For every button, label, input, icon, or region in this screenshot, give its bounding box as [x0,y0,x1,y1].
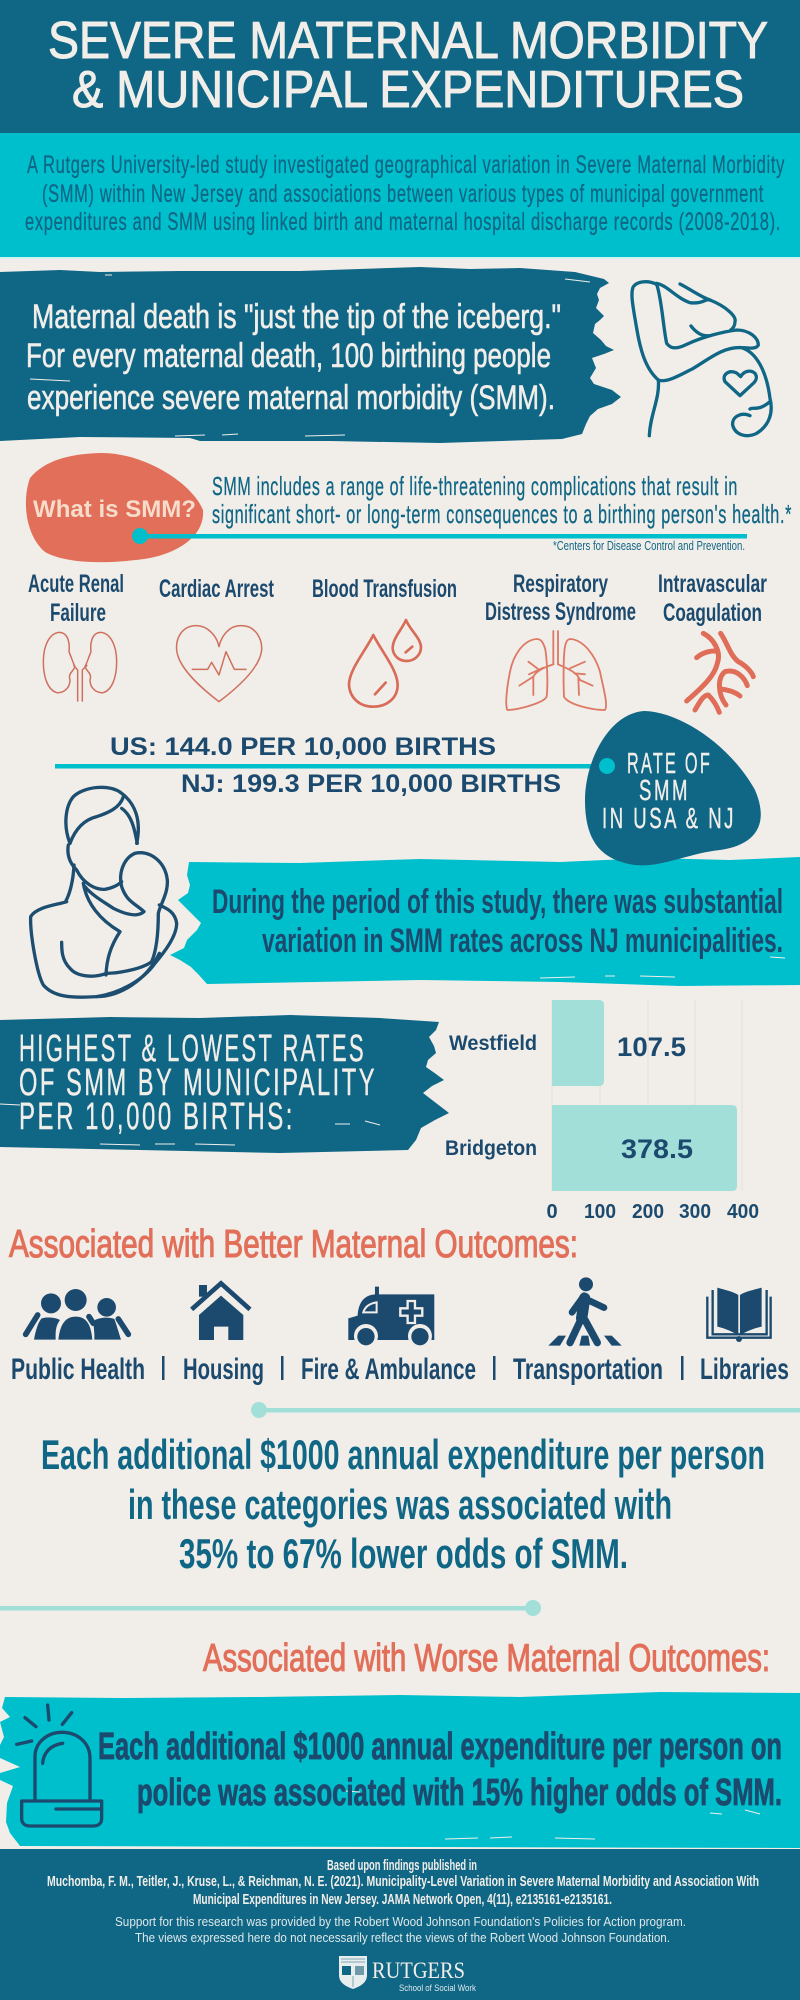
bar chart: SMM by municipality: 400 [727,1201,759,1223]
brush banner: highest and lowest rates: OF SMM BY MUNICIPALITY [19,1062,377,1104]
complication: acute renal failure: Failure [50,599,106,627]
bar chart: SMM by municipality: 100 [584,1201,616,1223]
icon: public health [26,1289,128,1340]
icon: mother and baby [31,787,177,997]
complication: blood transfusion: Blood Transfusion [312,575,457,603]
brush banner: highest and lowest rates: HIGHEST & LOWEST RATES [19,1028,366,1070]
funding note: Support for this research was provided by the Robert Wood Johnson Foundation's Policies for Action program. [115,1914,686,1929]
complication: cardiac arrest [159,575,274,702]
complication: acute renal failure [28,570,124,702]
source citation: Based upon findings published in [327,1857,477,1874]
lower odds statement: 35% to 67% lower odds of SMM. [179,1530,628,1577]
callout: tip of the iceberg [0,267,621,443]
bar chart: SMM by municipality: 107.5 [617,1032,686,1062]
funding note: The views expressed here do not necessarily reflect the views of the Robert Wood Johnson Foundation. [135,1930,670,1945]
category labels [11,1353,789,1386]
rate of SMM badge: SMM [639,775,690,807]
icon: libraries [707,1288,771,1342]
complication: cardiac arrest: Cardiac Arrest [159,575,274,603]
rate of SMM badge [585,711,761,865]
lower odds statement [0,1402,800,1616]
icon: housing [192,1283,250,1340]
source citation: Municipal Expenditures in New Jersey. JAMA Network Open, 4(11), e2135161-e2135161. [193,1891,612,1908]
logo: Rutgers School of Social Work [339,1956,476,1994]
better outcome categories [11,1277,789,1386]
rate of SMM badge: RATE OF [627,748,712,780]
category labels: Public Health [11,1353,145,1386]
brush banner: highest and lowest rates [0,1015,449,1153]
bar chart: SMM by municipality [445,1000,759,1223]
complication: respiratory distress syndrome [485,570,636,710]
bar chart: SMM by municipality: Westfield [449,1032,537,1055]
cyan callout: police expenditure [0,1692,800,1848]
title banner [0,0,800,133]
complication: respiratory distress syndrome: Respiratory [513,570,608,598]
title banner: & MUNICIPAL EXPENDITURES [72,61,744,119]
logo: Rutgers School of Social Work: School of Social Work [399,1983,476,1994]
heading: better outcomes: Associated with Better Maternal Outcomes: [9,1223,578,1266]
complication: blood transfusion [312,575,457,707]
bar chart: SMM by municipality: Bridgeton [445,1137,537,1160]
callout: tip of the iceberg: For every maternal death, 100 birthing people [26,337,551,375]
US and NJ rates: US: 144.0 PER 10,000 BIRTHS [110,733,496,761]
funding note [115,1914,686,1945]
complication: intravascular coagulation [658,570,767,712]
category labels: Transportation [513,1353,663,1386]
complication: respiratory distress syndrome: Distress Syndrome [485,598,636,626]
bar chart: SMM by municipality: 300 [679,1201,711,1223]
intro band [0,133,800,259]
source citation [47,1857,759,1908]
callout: tip of the iceberg: Maternal death is "just the tip of the iceberg." [32,298,561,336]
bar chart: SMM by municipality: 0 [546,1201,558,1223]
SMM definition [132,471,792,553]
complications [28,570,767,712]
bar chart: SMM by municipality: 378.5 [621,1134,693,1164]
bar chart: SMM by municipality: 200 [632,1201,664,1223]
complication: acute renal failure: Acute Renal [28,570,124,598]
category labels: Fire & Ambulance [301,1353,476,1386]
callout: tip of the iceberg: experience severe maternal morbidity (SMM). [27,379,555,417]
US and NJ rates: NJ: 199.3 PER 10,000 BIRTHS [181,770,561,798]
logo: Rutgers School of Social Work: RUTGERS [372,1958,465,1983]
brush banner: highest and lowest rates: PER 10,000 BIRTHS: [19,1096,295,1138]
icon: transportation [548,1277,622,1346]
what is SMM badge: What is SMM? [33,496,196,523]
icon: police siren [17,1705,102,1826]
footer [0,1849,800,2000]
US and NJ rates [55,733,607,798]
cyan callout: municipal variation [170,857,800,986]
category labels: Housing [183,1353,264,1386]
icon: pregnant person [632,282,771,436]
what is SMM badge [26,453,203,562]
icon: ambulance [348,1287,434,1348]
